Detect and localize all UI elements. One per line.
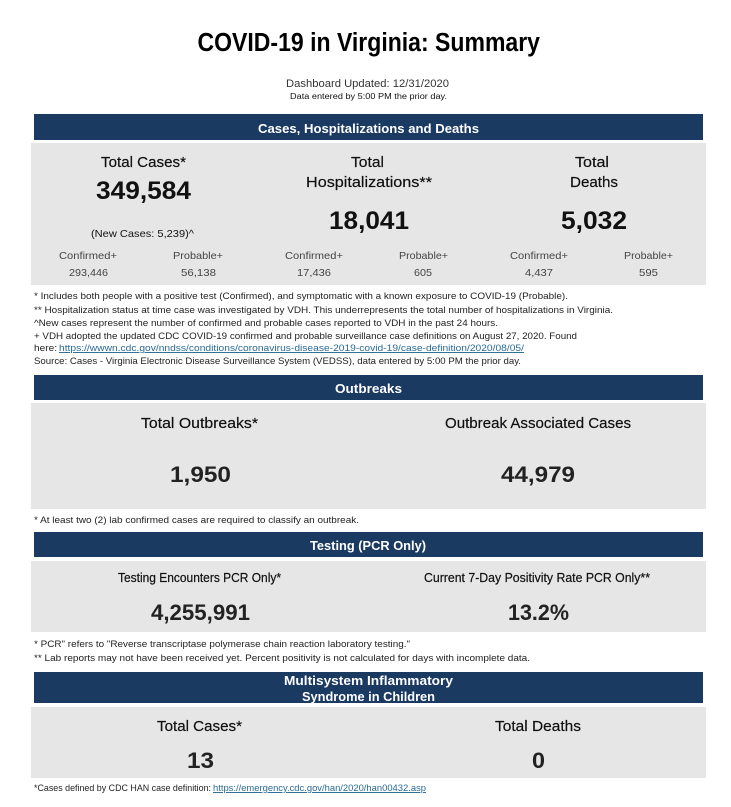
total outbreaks metric: Total Outbreaks* — [141, 415, 258, 432]
total hospitalizations metric: 17,436 — [297, 267, 331, 279]
total cases metric — [59, 154, 223, 279]
footnotes: testing — [34, 639, 530, 664]
outbreak associated cases metric: Outbreak Associated Cases — [445, 415, 631, 432]
footnote: MIS case definition — [34, 783, 426, 794]
total cases metric: Total Cases* — [101, 154, 186, 171]
total hospitalizations metric: Probable+ — [399, 250, 448, 262]
MIS total cases metric: 13 — [187, 748, 214, 773]
total cases metric: Confirmed+ — [59, 250, 117, 262]
MIS total cases metric — [157, 718, 242, 773]
footnotes: cases section: ^New cases represent the number of confirmed and probable cases reported to VDH in the past 24 hours. — [34, 318, 498, 329]
footnotes: cases section: * Includes both people with a positive test (Confirmed), and symptomatic with a known exposure to COVID-19 (Probable). — [34, 291, 568, 302]
section header: outbreaks: Outbreaks — [335, 382, 402, 396]
section header: outbreaks — [34, 375, 703, 400]
total deaths metric: Probable+ — [624, 250, 673, 262]
section header: multisystem inflammatory syndrome: Syndrome in Children — [302, 690, 435, 704]
panel: multisystem inflammatory syndrome — [31, 707, 706, 778]
footnotes: cases section: + VDH adopted the updated CDC COVID-19 confirmed and probable surveillance case definitions on August 27, 2020. Found — [34, 331, 577, 342]
total deaths metric: 4,437 — [525, 267, 553, 279]
footnotes: testing: * PCR" refers to "Reverse transcriptase polymerase chain reaction laboratory testing." — [34, 639, 410, 650]
section header: multisystem inflammatory syndrome — [34, 672, 703, 704]
section header: cases, hospitalizations and deaths — [34, 114, 703, 140]
total deaths metric — [510, 154, 673, 279]
total cases metric: 349,584 — [96, 177, 191, 205]
total deaths metric: Deaths — [570, 174, 618, 191]
footnote: MIS case definition: *Cases defined by CDC HAN case definition: — [34, 783, 211, 794]
footnotes: cases section: https://wwwn.cdc.gov/nndss/conditions/coronavirus-disease-2019-covid-19/case-definition/2020/08/05/ — [59, 343, 524, 354]
footnotes: cases section — [34, 291, 613, 367]
total hospitalizations metric: Total — [351, 154, 384, 171]
MIS total cases metric: Total Cases* — [157, 718, 242, 735]
footnotes: cases section: ** Hospitalization status at time case was investigated by VDH. This underrepresents the total number of hospitalizations in Virginia. — [34, 305, 613, 316]
total deaths metric: 5,032 — [561, 207, 627, 235]
section header: testing: Testing (PCR Only) — [310, 539, 426, 553]
testing encounters metric: Testing Encounters PCR Only* — [118, 571, 281, 585]
total hospitalizations metric: Hospitalizations** — [306, 174, 432, 191]
section header: multisystem inflammatory syndrome: Multisystem Inflammatory — [284, 674, 453, 688]
positivity rate metric — [424, 571, 650, 625]
total cases metric: Probable+ — [173, 250, 223, 262]
footnotes: testing: ** Lab reports may not have been received yet. Percent positivity is not calculated for days with incomplete data. — [34, 653, 530, 664]
total cases metric: 293,446 — [69, 267, 108, 279]
outbreak associated cases metric — [445, 415, 631, 487]
positivity rate metric: Current 7-Day Positivity Rate PCR Only** — [424, 571, 650, 585]
footnotes: cases section: Source: Cases - Virginia Electronic Disease Surveillance System (VEDSS), data entered by 5:00 PM the prior day. — [34, 356, 521, 367]
footnotes: cases section: here: — [34, 343, 57, 354]
section header: cases, hospitalizations and deaths: Cases, Hospitalizations and Deaths — [258, 122, 479, 136]
outbreak associated cases metric: 44,979 — [501, 462, 575, 487]
section header: testing — [34, 532, 703, 557]
MIS total deaths metric — [495, 718, 581, 773]
panel: cases, hospitalizations and deaths — [31, 143, 706, 285]
total deaths metric: 595 — [639, 267, 658, 279]
total deaths metric: Confirmed+ — [510, 250, 568, 262]
dashboard updated date — [286, 78, 449, 101]
total hospitalizations metric: 605 — [414, 267, 432, 279]
total hospitalizations metric: Confirmed+ — [285, 250, 343, 262]
total deaths metric: Total — [575, 154, 609, 171]
title: COVID-19 in Virginia: Summary — [198, 29, 541, 57]
total cases metric: (New Cases: 5,239)^ — [91, 228, 194, 240]
total outbreaks metric — [141, 415, 258, 487]
MIS total deaths metric: 0 — [532, 748, 545, 773]
footnote: outbreaks: * At least two (2) lab confirmed cases are required to classify an outbreak. — [34, 515, 359, 526]
testing encounters metric: 4,255,991 — [151, 600, 250, 625]
panel: testing — [31, 561, 706, 632]
total outbreaks metric: 1,950 — [170, 462, 231, 487]
total hospitalizations metric: 18,041 — [329, 207, 409, 235]
total cases metric: 56,138 — [181, 267, 216, 279]
footnote: MIS case definition: https://emergency.cdc.gov/han/2020/han00432.asp — [213, 783, 426, 794]
dashboard updated date: Dashboard Updated: 12/31/2020 — [286, 78, 449, 90]
testing encounters metric — [118, 571, 281, 625]
panel: outbreaks — [31, 403, 706, 509]
dashboard updated date: Data entered by 5:00 PM the prior day. — [290, 92, 447, 101]
positivity rate metric: 13.2% — [508, 600, 569, 625]
total hospitalizations metric — [285, 154, 448, 279]
MIS total deaths metric: Total Deaths — [495, 718, 581, 735]
